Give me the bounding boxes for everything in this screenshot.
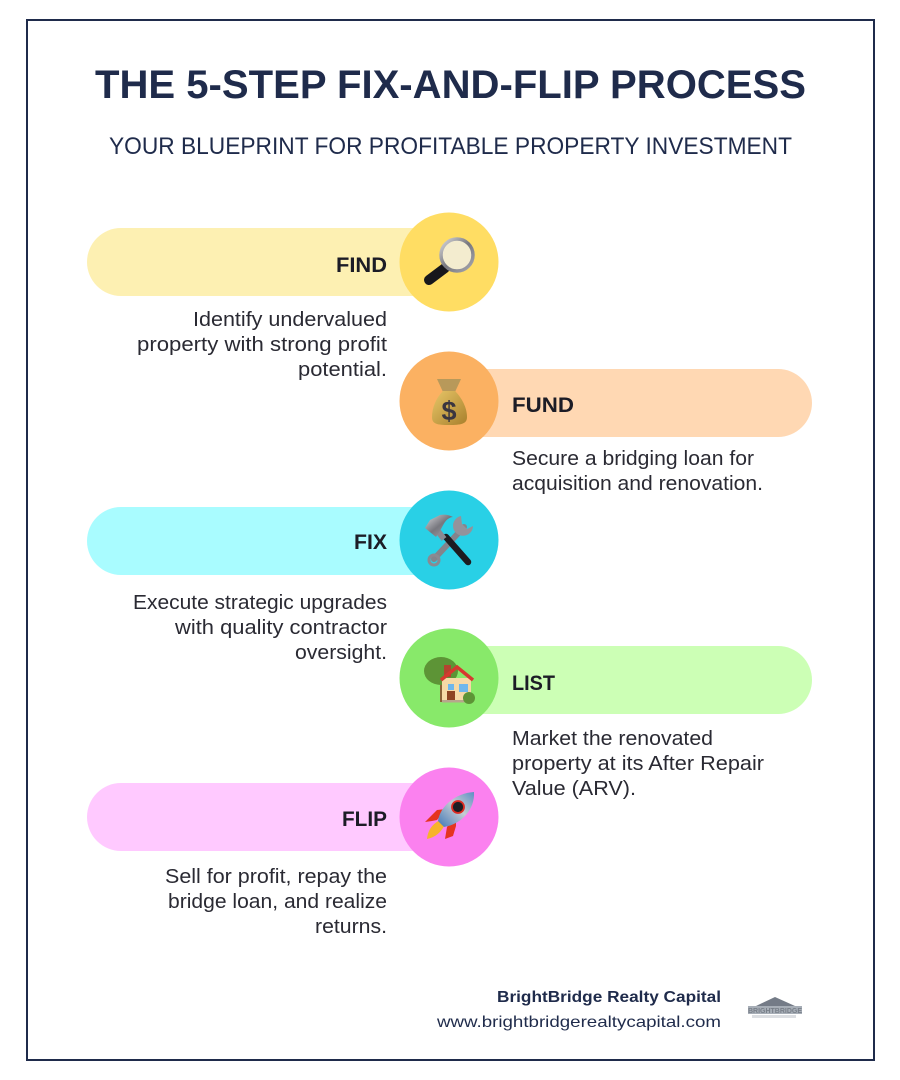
list label: LIST [512,672,555,695]
step 5: flip [87,768,498,938]
fund label: FUND [512,394,574,417]
fix description: with quality contractor [174,617,387,639]
flip pill [87,783,467,851]
footer logo: BRIGHTBRIDGE [748,1008,802,1015]
icon: money bag [432,379,467,426]
fund description: Secure a bridging loan for [512,448,754,470]
icon: house with tree [424,657,475,704]
icon: hammer and wrench [425,515,473,565]
find pill [87,228,467,296]
footer logo [748,997,802,1018]
flip description: returns. [315,916,387,938]
step 4: list [400,628,812,800]
fix description: Execute strategic upgrades [133,592,387,614]
fix description [133,592,387,664]
flip description [165,866,387,938]
list description: Market the renovated [512,728,713,750]
footer company name: BrightBridge Realty Capital [497,989,721,1006]
footer website: www.brightbridgerealtycapital.com [436,1014,721,1031]
fix label: FIX [354,531,387,554]
flip circle [400,768,498,866]
fix circle [400,490,498,590]
subtitle: YOUR BLUEPRINT FOR PROFITABLE PROPERTY INVESTMENT [109,133,792,160]
list circle [400,628,498,728]
step 2: fund [400,352,812,495]
list description [512,728,764,800]
flip description: bridge loan, and realize [168,891,387,913]
find circle [400,212,498,312]
flip description: Sell for profit, repay the [165,866,387,888]
fund description: acquisition and renovation. [512,473,763,495]
fix description: oversight. [295,642,387,664]
list description: property at its After Repair [512,753,764,775]
find description: Identify undervalued [193,309,387,331]
flip label: FLIP [342,808,387,831]
find description: potential. [298,359,387,381]
find description [137,309,387,381]
fix pill [87,507,467,575]
list pill [432,646,812,714]
fund circle [400,352,498,450]
step 3: fix [87,490,498,664]
find label: FIND [336,254,387,277]
list description: Value (ARV). [512,778,636,800]
fund pill [432,369,812,437]
title: THE 5-STEP FIX-AND-FLIP PROCESS [95,63,806,107]
icon: magnifying glass [429,239,473,280]
fund description [512,448,763,495]
step 1: find [87,212,498,381]
icon: money bag: $ [441,396,457,426]
icon: rocket [425,792,474,839]
find description: property with strong profit [137,334,387,356]
